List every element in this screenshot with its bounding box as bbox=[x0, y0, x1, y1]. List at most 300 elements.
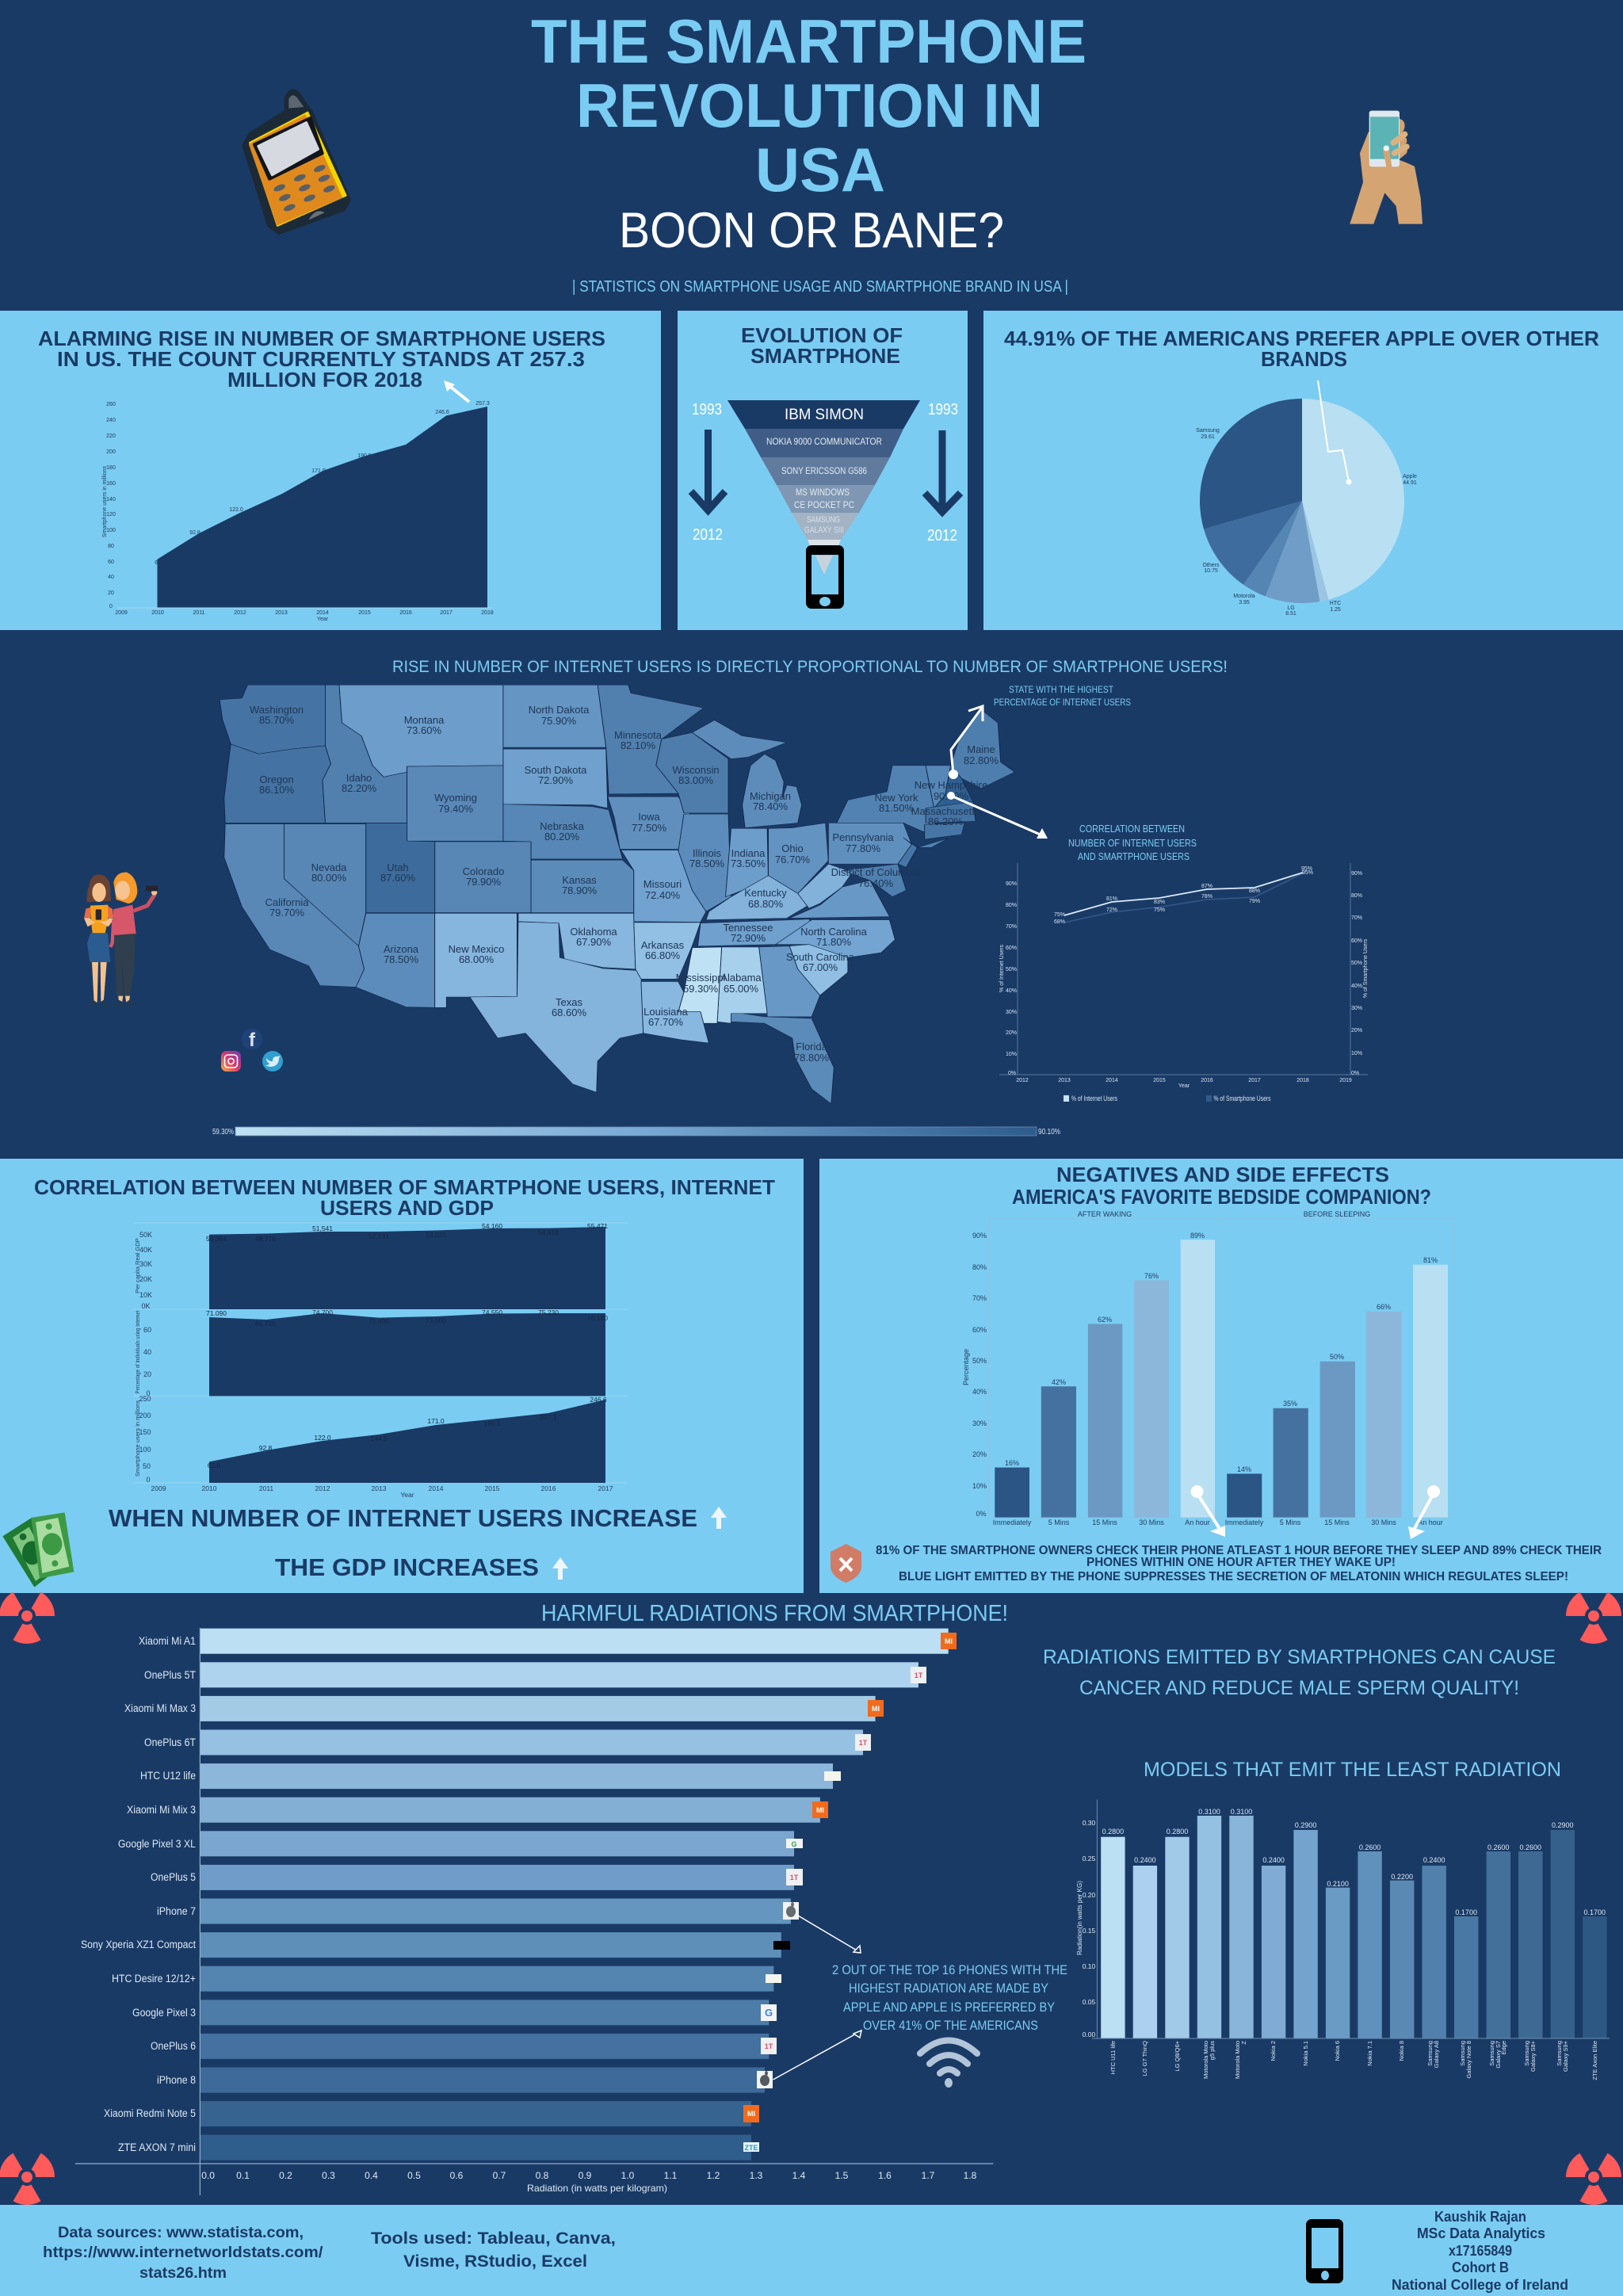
legend bbox=[1064, 1095, 1271, 1102]
state: Tennessee bbox=[697, 919, 812, 946]
y axis labels: 0K bbox=[141, 1302, 151, 1310]
funnel labels: SONY ERICSSON G586 bbox=[781, 465, 867, 476]
value labels: 75% bbox=[1154, 907, 1165, 913]
arrow: to 257.3 peak bbox=[444, 380, 469, 402]
map: state labels: Kansas bbox=[562, 874, 597, 886]
section heading: internet users: RISE IN NUMBER OF INTERNET USERS IS DIRECTLY PROPORTIONAL TO NUMBER OF SMARTPHONE USERS! bbox=[392, 658, 1228, 676]
tools used bbox=[371, 2229, 616, 2271]
y axis labels: 100 bbox=[106, 528, 116, 533]
map: state labels: 82.10% bbox=[621, 739, 655, 751]
logo: OnePlus bbox=[855, 1734, 871, 1751]
value labels: 51,541 bbox=[312, 1224, 333, 1232]
value labels: 171.0 bbox=[427, 1417, 445, 1425]
value labels bbox=[155, 401, 490, 566]
logo: Xiaomi: MI bbox=[747, 2110, 755, 2118]
state: Louisiana bbox=[641, 982, 708, 1043]
x axis labels: 0.7 bbox=[493, 2170, 506, 2181]
statement: GDP increases: THE GDP INCREASES bbox=[275, 1553, 539, 1581]
state: California bbox=[224, 824, 365, 988]
x axis labels: 1.8 bbox=[964, 2170, 977, 2181]
value labels: 50,364 bbox=[206, 1235, 227, 1243]
map: state labels: 90.10% bbox=[934, 790, 968, 802]
callout: highest state: PERCENTAGE OF INTERNET USERS bbox=[994, 697, 1131, 708]
year labels: 2016 bbox=[541, 1484, 556, 1492]
y axis labels: 50K bbox=[139, 1231, 152, 1239]
pie labels: 44.91 bbox=[1403, 480, 1417, 486]
y axis labels: 0.00 bbox=[1083, 2030, 1096, 2038]
year labels: 2015 bbox=[485, 1484, 500, 1492]
value labels: 0.1700 bbox=[1455, 1908, 1477, 1916]
y axis labels: 200 bbox=[139, 1412, 151, 1419]
map: state labels: Michigan bbox=[750, 790, 791, 802]
map: state labels: Indiana bbox=[731, 847, 766, 859]
y axis labels: 0.30 bbox=[1083, 1819, 1096, 1827]
phone labels: Sony Xperia XZ1 Compact bbox=[81, 1939, 196, 1950]
year labels: 2011 bbox=[259, 1484, 273, 1492]
y axis labels: 60 bbox=[108, 560, 114, 565]
x axis labels: 1.6 bbox=[878, 2170, 892, 2181]
panel heading: IN US. THE COUNT CURRENTLY STANDS AT 257.3 bbox=[57, 347, 585, 371]
left axis labels bbox=[1006, 881, 1017, 1076]
map: state labels: Iowa bbox=[638, 811, 660, 823]
state: Maryland and Delaware bbox=[842, 864, 907, 897]
x axis labels: 0.0 bbox=[201, 2170, 215, 2181]
left axis labels: 40% bbox=[1006, 988, 1017, 994]
year labels: 2016 bbox=[1201, 1078, 1213, 1083]
year labels: 2012 bbox=[315, 1484, 330, 1492]
right axis labels: 60% bbox=[1351, 938, 1362, 944]
value labels: 87% bbox=[1201, 884, 1212, 889]
left axis labels: 30% bbox=[1006, 1010, 1017, 1015]
panel background bbox=[983, 311, 1623, 630]
model labels: Samsung bbox=[1523, 2041, 1530, 2066]
group labels: AFTER WAKING bbox=[1078, 1210, 1132, 1218]
bar chart: least radiation models bbox=[1076, 1800, 1610, 2080]
map: state labels: 72.90% bbox=[538, 774, 573, 786]
legend: % of Smartphone Users bbox=[1214, 1095, 1271, 1102]
y axis title: Radiation(in watts per KG) bbox=[1076, 1881, 1083, 1955]
panel background bbox=[819, 1159, 1623, 1593]
model labels: Samsung bbox=[1426, 2041, 1434, 2066]
map: state labels: 78.50% bbox=[689, 858, 724, 869]
timeline left bbox=[691, 401, 725, 544]
map: state labels: 67.90% bbox=[576, 936, 611, 948]
map: state labels: 81.50% bbox=[879, 802, 914, 814]
logo: Xiaomi: MI bbox=[872, 1705, 880, 1713]
value labels: 92.8 bbox=[189, 530, 200, 536]
year labels: 2018 bbox=[1296, 1078, 1309, 1083]
left axis labels: 50% bbox=[1006, 967, 1017, 972]
state: Utah bbox=[366, 823, 435, 912]
map: state labels: Ohio bbox=[781, 842, 804, 854]
map: state labels: Minnesota bbox=[614, 729, 663, 741]
funnel labels bbox=[766, 407, 882, 535]
x axis labels bbox=[993, 1519, 1443, 1526]
pie labels: 3.95 bbox=[1239, 600, 1250, 606]
model labels: Edge bbox=[1500, 2041, 1507, 2055]
value labels: 55,471 bbox=[587, 1222, 608, 1230]
slice: Apple bbox=[1302, 399, 1404, 600]
state: Minnesota bbox=[598, 685, 703, 794]
pie labels bbox=[1196, 428, 1417, 617]
arrow: correlation callout bbox=[947, 792, 1048, 839]
state: Kansas bbox=[531, 860, 634, 912]
area: internet users bbox=[209, 1313, 605, 1396]
value labels: 48,776 bbox=[255, 1235, 276, 1243]
x axis labels: 2012 bbox=[234, 610, 246, 616]
model labels: Motorola Moto bbox=[1234, 2041, 1241, 2079]
state: South Carolina bbox=[789, 945, 848, 995]
callout: correlation: AND SMARTPHONE USERS bbox=[1078, 850, 1190, 862]
state: Arizona bbox=[356, 913, 435, 1007]
map: state labels: 83.00% bbox=[678, 774, 713, 786]
panel heading bbox=[1012, 1163, 1431, 1209]
icon: twitter bbox=[262, 1051, 283, 1072]
map colour legend: 90.10% bbox=[1038, 1128, 1060, 1137]
logo: Google: G bbox=[791, 1840, 797, 1848]
state: Massachusetts bbox=[926, 801, 976, 823]
y axis labels: 0.20 bbox=[1083, 1891, 1096, 1899]
text: radiation warning: CANCER AND REDUCE MALE SPERM QUALITY! bbox=[1079, 1677, 1519, 1699]
state: Missouri bbox=[621, 850, 706, 923]
state: New Hampshire bbox=[934, 766, 973, 808]
state: Idaho bbox=[323, 685, 407, 823]
y axis labels bbox=[1083, 1819, 1096, 2038]
axis titles: Percentage of Individuals using Internet bbox=[134, 1310, 141, 1393]
x axis labels: 2010 bbox=[151, 610, 164, 616]
icon: radiation top left bbox=[0, 1592, 55, 1644]
map: state labels: Arizona bbox=[384, 943, 419, 955]
bars bbox=[1101, 1816, 1607, 2038]
arrow: up bbox=[552, 1557, 568, 1580]
y axis labels: 0% bbox=[976, 1510, 987, 1518]
pie chart bbox=[1196, 399, 1417, 617]
value labels: 71.090 bbox=[206, 1309, 227, 1317]
map: state labels: North Carolina bbox=[800, 926, 868, 938]
left axis labels: 80% bbox=[1006, 903, 1017, 908]
pie labels: Motorola bbox=[1233, 594, 1255, 599]
model labels: Nokia 6 bbox=[1334, 2041, 1341, 2061]
value labels: 0.2900 bbox=[1552, 1821, 1574, 1829]
value labels: 81% bbox=[1423, 1256, 1438, 1264]
value labels: 54,616 bbox=[538, 1228, 559, 1236]
text: sleep statistics: 81% OF THE SMARTPHONE OWNERS CHECK THEIR PHONE ATLEAST 1 HOUR BEFORE THEY SLEEP AND 89% CHECK THEIR bbox=[876, 1544, 1602, 1557]
axis titles: % of Internet Users bbox=[999, 945, 1005, 992]
map: state labels: 82.80% bbox=[964, 755, 999, 766]
map: state labels: 77.80% bbox=[846, 842, 880, 854]
phone labels: iPhone 7 bbox=[157, 1905, 196, 1917]
year labels: 2014 bbox=[429, 1484, 444, 1492]
state: North Dakota bbox=[503, 685, 606, 747]
state: Michigan bbox=[692, 720, 802, 828]
phone labels: Xiaomi Mi Max 3 bbox=[124, 1702, 196, 1714]
arrow: up bbox=[711, 1507, 727, 1529]
value labels: 0.3100 bbox=[1231, 1808, 1252, 1816]
map: state labels: Wyoming bbox=[434, 792, 477, 804]
map: state labels: 79.70% bbox=[269, 907, 304, 919]
author credits: Cohort B bbox=[1452, 2260, 1509, 2275]
area: GDP bbox=[209, 1227, 605, 1309]
callout: highest state bbox=[994, 684, 1131, 708]
phone labels: HTC U12 life bbox=[140, 1770, 196, 1782]
panel: evolution of smartphone bbox=[678, 311, 968, 630]
logo: Xiaomi: MI bbox=[945, 1637, 953, 1645]
brand logos bbox=[743, 1633, 957, 2152]
author credits: Kaushik Rajan bbox=[1434, 2209, 1526, 2225]
state: Connecticut and Rhode Island bbox=[925, 823, 964, 839]
model labels: Nokia 5.1 bbox=[1302, 2041, 1309, 2066]
phone labels: Google Pixel 3 XL bbox=[118, 1838, 196, 1850]
map: state labels: 68.60% bbox=[552, 1007, 586, 1018]
value labels: 73.000 bbox=[426, 1316, 446, 1324]
phone labels: Xiaomi Redmi Note 5 bbox=[104, 2107, 196, 2119]
logo: Apple bbox=[783, 1902, 799, 1920]
state: South Dakota bbox=[503, 749, 608, 808]
logo: Xiaomi bbox=[812, 1801, 828, 1818]
map: state labels: Missouri bbox=[643, 878, 682, 890]
funnel labels: CE POCKET PC bbox=[794, 499, 854, 510]
year labels: 2012 bbox=[1016, 1078, 1029, 1083]
tools used: Tools used: Tableau, Canva, bbox=[371, 2229, 616, 2248]
state: New York bbox=[837, 766, 948, 847]
value labels: 88% bbox=[1249, 888, 1260, 894]
value labels: 78% bbox=[1201, 894, 1212, 900]
pie labels: Others bbox=[1202, 563, 1220, 568]
funnel: Samsung bbox=[792, 513, 859, 540]
model labels: LG G7 ThinQ bbox=[1141, 2041, 1148, 2076]
map: state labels: Massachusetts bbox=[911, 805, 980, 817]
bars: after waking bbox=[995, 1240, 1215, 1518]
map colour legend bbox=[212, 1127, 1060, 1137]
state: Montana bbox=[339, 685, 503, 777]
text: radiation warning: RADIATIONS EMITTED BY SMARTPHONES CAN CAUSE bbox=[1043, 1646, 1556, 1668]
y axis labels: 70% bbox=[972, 1294, 987, 1302]
phone labels: OnePlus 6 bbox=[151, 2040, 196, 2052]
value labels: 68.725 bbox=[255, 1320, 276, 1328]
panel heading: AMERICA'S FAVORITE BEDSIDE COMPANION? bbox=[1012, 1185, 1431, 1209]
value labels: 74.700 bbox=[312, 1308, 333, 1316]
y axis labels: 180 bbox=[106, 465, 116, 471]
y axis labels: 50 bbox=[143, 1462, 151, 1470]
value labels: 144.5 bbox=[280, 497, 294, 502]
map: state labels: 79.40% bbox=[438, 803, 473, 815]
text: sleep statistics: PHONES WITHIN ONE HOUR AFTER THEY WAKE UP! bbox=[1086, 1556, 1396, 1569]
footer background bbox=[0, 2205, 1623, 2296]
model labels: Z bbox=[1240, 2041, 1247, 2045]
value labels bbox=[1054, 866, 1313, 925]
value labels: 207.1 bbox=[540, 1413, 557, 1421]
arrow: to Apple slice bbox=[1318, 380, 1352, 485]
value labels: 95% bbox=[1301, 866, 1312, 872]
map: state labels: 78.80% bbox=[794, 1052, 829, 1064]
panel heading bbox=[38, 327, 605, 392]
axis titles: Smartphone users in millions bbox=[134, 1400, 141, 1477]
arrow: highest state callout bbox=[949, 706, 983, 779]
value labels: 171.0 bbox=[311, 468, 326, 474]
bars: before sleeping bbox=[1227, 1265, 1448, 1518]
map: state labels: New Hampshire bbox=[915, 779, 987, 791]
pie labels: 29.61 bbox=[1201, 434, 1215, 440]
statement: internet users increase: WHEN NUMBER OF INTERNET USERS INCREASE bbox=[109, 1504, 697, 1532]
logo: OnePlus bbox=[911, 1667, 926, 1683]
panel: negatives and side effects bbox=[819, 1159, 1623, 1593]
text: radiation warning bbox=[1043, 1646, 1556, 1699]
x axis labels: 2017 bbox=[440, 610, 453, 616]
phone labels: Xiaomi Mi A1 bbox=[139, 1635, 196, 1647]
value labels: 75% bbox=[1054, 912, 1065, 918]
data sources: https://www.internetworldstats.com/ bbox=[43, 2244, 323, 2261]
y axis labels bbox=[106, 402, 116, 609]
panel heading: NEGATIVES AND SIDE EFFECTS bbox=[1056, 1163, 1389, 1186]
x axis labels: 0.9 bbox=[579, 2170, 592, 2181]
x axis labels: 0.8 bbox=[536, 2170, 549, 2181]
right axis labels: 90% bbox=[1351, 871, 1362, 877]
callout: correlation: NUMBER OF INTERNET USERS bbox=[1068, 837, 1197, 849]
callout: correlation: CORRELATION BETWEEN bbox=[1079, 823, 1185, 835]
right axis labels: 20% bbox=[1351, 1028, 1362, 1033]
map: state labels: New Mexico bbox=[449, 943, 504, 955]
x axis labels: 1.7 bbox=[922, 2170, 935, 2181]
y axis labels: 60% bbox=[972, 1326, 987, 1334]
funnel: MS Windows bbox=[777, 485, 875, 513]
panel heading: USERS AND GDP bbox=[320, 1196, 494, 1220]
model labels: Nokia 8 bbox=[1398, 2041, 1405, 2061]
y axis labels: 40K bbox=[139, 1246, 152, 1254]
value labels: 42% bbox=[1052, 1378, 1066, 1386]
callout: apple radiation: OVER 41% OF THE AMERICANS bbox=[863, 2018, 1038, 2033]
title line 3: USA bbox=[755, 135, 885, 204]
map: state labels: Maine bbox=[967, 743, 995, 755]
panel heading bbox=[741, 323, 903, 368]
axes bbox=[1092, 1800, 1610, 2038]
map: state labels: 76.70% bbox=[775, 854, 810, 865]
value labels: 207.1 bbox=[402, 445, 416, 451]
x axis labels: 2013 bbox=[275, 610, 288, 616]
state: Nebraska bbox=[503, 804, 623, 859]
logo: Xiaomi bbox=[941, 1633, 957, 1649]
x axis labels: An hour bbox=[1185, 1519, 1210, 1526]
right axis labels: 80% bbox=[1351, 893, 1362, 899]
y axis labels: 140 bbox=[106, 497, 116, 502]
y axis labels: 40 bbox=[143, 1348, 151, 1356]
icon: instagram bbox=[221, 1051, 241, 1072]
x axis labels: 5 Mins bbox=[1048, 1519, 1070, 1526]
model labels: Motorola Moto bbox=[1202, 2041, 1209, 2079]
value labels: 74.550 bbox=[482, 1308, 502, 1316]
callout: apple radiation: 2 OUT OF THE TOP 16 PHONES WITH THE bbox=[832, 1962, 1067, 1977]
axis titles: Per capita Real GDP bbox=[134, 1238, 141, 1293]
text: sleep statistics bbox=[876, 1544, 1602, 1584]
value labels: 72% bbox=[1106, 907, 1117, 913]
value labels: 35% bbox=[1283, 1400, 1297, 1408]
value labels: 0.2800 bbox=[1102, 1828, 1124, 1836]
x axis labels bbox=[201, 2170, 977, 2181]
icon: radiation top right bbox=[1566, 1592, 1621, 1644]
value labels: 122.0 bbox=[314, 1434, 331, 1442]
value labels: 66% bbox=[1377, 1303, 1391, 1311]
map: state labels: Florida bbox=[796, 1041, 828, 1052]
logo: Xiaomi: MI bbox=[816, 1806, 824, 1814]
pie labels: Samsung bbox=[1196, 428, 1220, 434]
value labels: 79% bbox=[1249, 899, 1260, 904]
state: Ohio bbox=[769, 823, 828, 893]
y axis labels: 220 bbox=[106, 434, 116, 439]
value labels: 16% bbox=[1005, 1459, 1019, 1467]
y axis labels bbox=[972, 1232, 987, 1518]
model labels: ZTE Axon Elite bbox=[1591, 2041, 1598, 2080]
state: Texas bbox=[470, 922, 643, 1092]
value labels: 62% bbox=[1098, 1316, 1112, 1324]
map: state labels: Utah bbox=[387, 861, 409, 873]
y axis labels: 240 bbox=[106, 418, 116, 423]
x axis labels: 1.4 bbox=[792, 2170, 806, 2181]
state: Alabama bbox=[717, 947, 767, 1023]
logo: Google bbox=[761, 2004, 777, 2021]
map: state labels: Wisconsin bbox=[672, 764, 720, 776]
map: state labels: South Dakota bbox=[525, 764, 587, 776]
y axis labels: 30K bbox=[139, 1260, 152, 1268]
map: state labels: 72.90% bbox=[731, 932, 766, 944]
value labels: 144.5 bbox=[370, 1435, 388, 1442]
phone labels: HTC Desire 12/12+ bbox=[112, 1973, 196, 1985]
funnel labels: IBM SIMON bbox=[785, 407, 864, 423]
funnel labels: GALAXY SIII bbox=[804, 525, 844, 535]
value labels: 0.2600 bbox=[1520, 1843, 1541, 1851]
model labels: LG Q8/Q6+ bbox=[1174, 2040, 1181, 2072]
y axis labels: 50% bbox=[972, 1357, 987, 1365]
state: Iowa bbox=[608, 797, 695, 849]
value labels: 62.6 bbox=[208, 1461, 221, 1469]
y axis labels: 80% bbox=[972, 1263, 987, 1271]
right axis labels: 30% bbox=[1351, 1006, 1362, 1011]
funnel labels: MS WINDOWS bbox=[796, 487, 850, 498]
y axis labels: 0.05 bbox=[1083, 1998, 1096, 2006]
pie labels: 8.51 bbox=[1285, 611, 1296, 617]
data sources: stats26.htm bbox=[139, 2265, 227, 2282]
value labels: 246.6 bbox=[435, 410, 449, 415]
x axis labels: 0.4 bbox=[365, 2170, 378, 2181]
x axis labels: 1.5 bbox=[835, 2170, 849, 2181]
right axis labels: 10% bbox=[1351, 1051, 1362, 1056]
y axis labels: 20% bbox=[972, 1450, 987, 1458]
state: Colorado bbox=[435, 842, 531, 912]
model labels: HTC U11 life bbox=[1109, 2041, 1117, 2074]
logo: HTC bbox=[824, 1771, 841, 1781]
panel: GDP correlation bbox=[0, 1159, 804, 1593]
state: Maine bbox=[951, 709, 1014, 789]
bars bbox=[200, 1629, 949, 2160]
phone labels: Google Pixel 3 bbox=[132, 2007, 196, 2019]
value labels: 62.5 bbox=[155, 560, 166, 566]
map: state labels: 80.00% bbox=[311, 872, 346, 884]
state: Oregon bbox=[224, 744, 330, 823]
map: state labels: 78.50% bbox=[384, 953, 418, 965]
y axis title: Percentage bbox=[962, 1349, 970, 1385]
state: Wisconsin bbox=[656, 732, 728, 813]
x axis labels: 15 Mins bbox=[1324, 1519, 1350, 1526]
map: state labels: Alabama bbox=[720, 972, 762, 984]
tagline: | STATISTICS ON SMARTPHONE USAGE AND SMARTPHONE BRAND IN USA | bbox=[572, 278, 1068, 296]
value labels: 0.2400 bbox=[1134, 1856, 1156, 1864]
panel: smartphone users rise bbox=[0, 311, 661, 630]
bar chart: phone checks bbox=[962, 1210, 1454, 1526]
funnel diagram bbox=[727, 400, 920, 546]
phone labels: Xiaomi Mi Mix 3 bbox=[127, 1804, 196, 1816]
funnel: tip bbox=[808, 540, 841, 546]
year labels: 2017 bbox=[1248, 1078, 1261, 1083]
map: state labels: 67.70% bbox=[648, 1016, 683, 1028]
icon: orange feature phone bbox=[243, 90, 350, 234]
